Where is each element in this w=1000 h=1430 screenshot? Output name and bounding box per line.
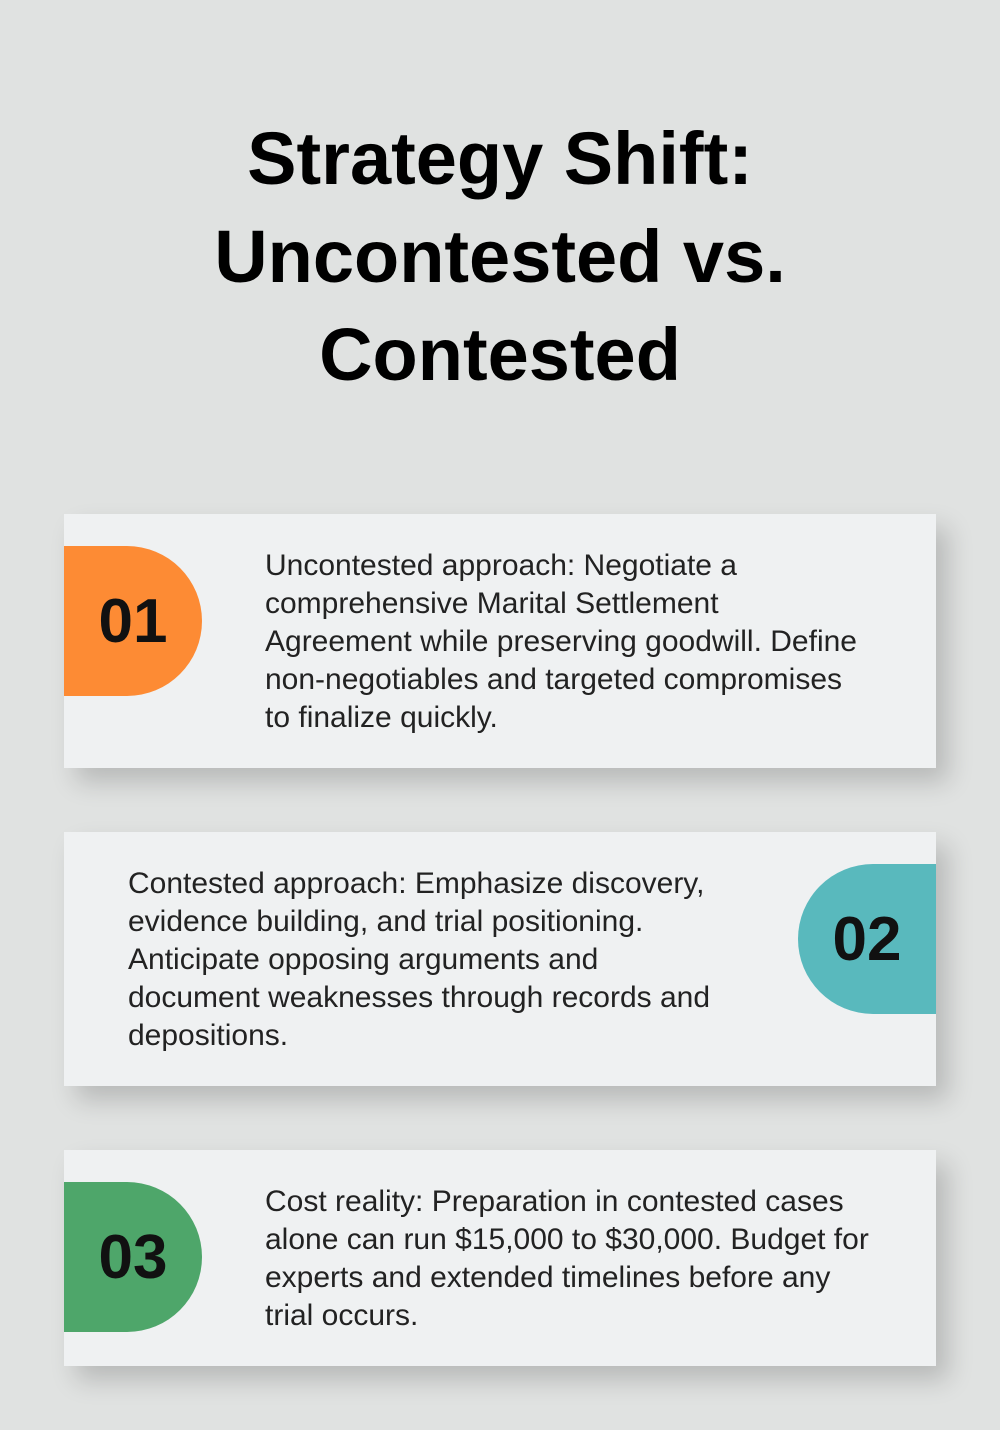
text 3 <box>265 1185 869 1332</box>
text 1: to finalize quickly. <box>265 701 498 734</box>
title: Uncontested vs. <box>214 215 786 298</box>
title: Strategy Shift: <box>247 117 753 200</box>
panel: card 3 <box>64 1150 936 1366</box>
text 1: non-negotiables and targeted compromises <box>265 663 842 696</box>
text 2: depositions. <box>128 1019 288 1052</box>
badge 02: 02 <box>833 904 901 974</box>
text 3: Cost reality: Preparation in contested cases <box>265 1185 844 1218</box>
badge 01 <box>64 546 202 696</box>
text 2: evidence building, and trial positioning. <box>128 905 643 938</box>
panel: card 1 <box>64 514 936 768</box>
text 1: Uncontested approach: Negotiate a <box>265 549 737 582</box>
title <box>214 117 786 396</box>
panel: card 2 <box>64 832 936 1086</box>
title: Contested <box>319 313 681 396</box>
badge 03 <box>64 1182 202 1332</box>
text 3: experts and extended timelines before any <box>265 1261 830 1294</box>
text 2: Contested approach: Emphasize discovery, <box>128 867 704 900</box>
badge 01: 01 <box>99 586 167 656</box>
text 1: comprehensive Marital Settlement <box>265 587 719 620</box>
text 2: document weaknesses through records and <box>128 981 710 1014</box>
text 1: Agreement while preserving goodwill. Define <box>265 625 857 658</box>
badge 03: 03 <box>99 1222 167 1292</box>
text 3: trial occurs. <box>265 1299 418 1332</box>
badge 02 <box>798 864 936 1014</box>
text 2: Anticipate opposing arguments and <box>128 943 598 976</box>
text 3: alone can run $15,000 to $30,000. Budget for <box>265 1223 869 1256</box>
text 2 <box>128 867 710 1052</box>
text 1 <box>265 549 857 734</box>
